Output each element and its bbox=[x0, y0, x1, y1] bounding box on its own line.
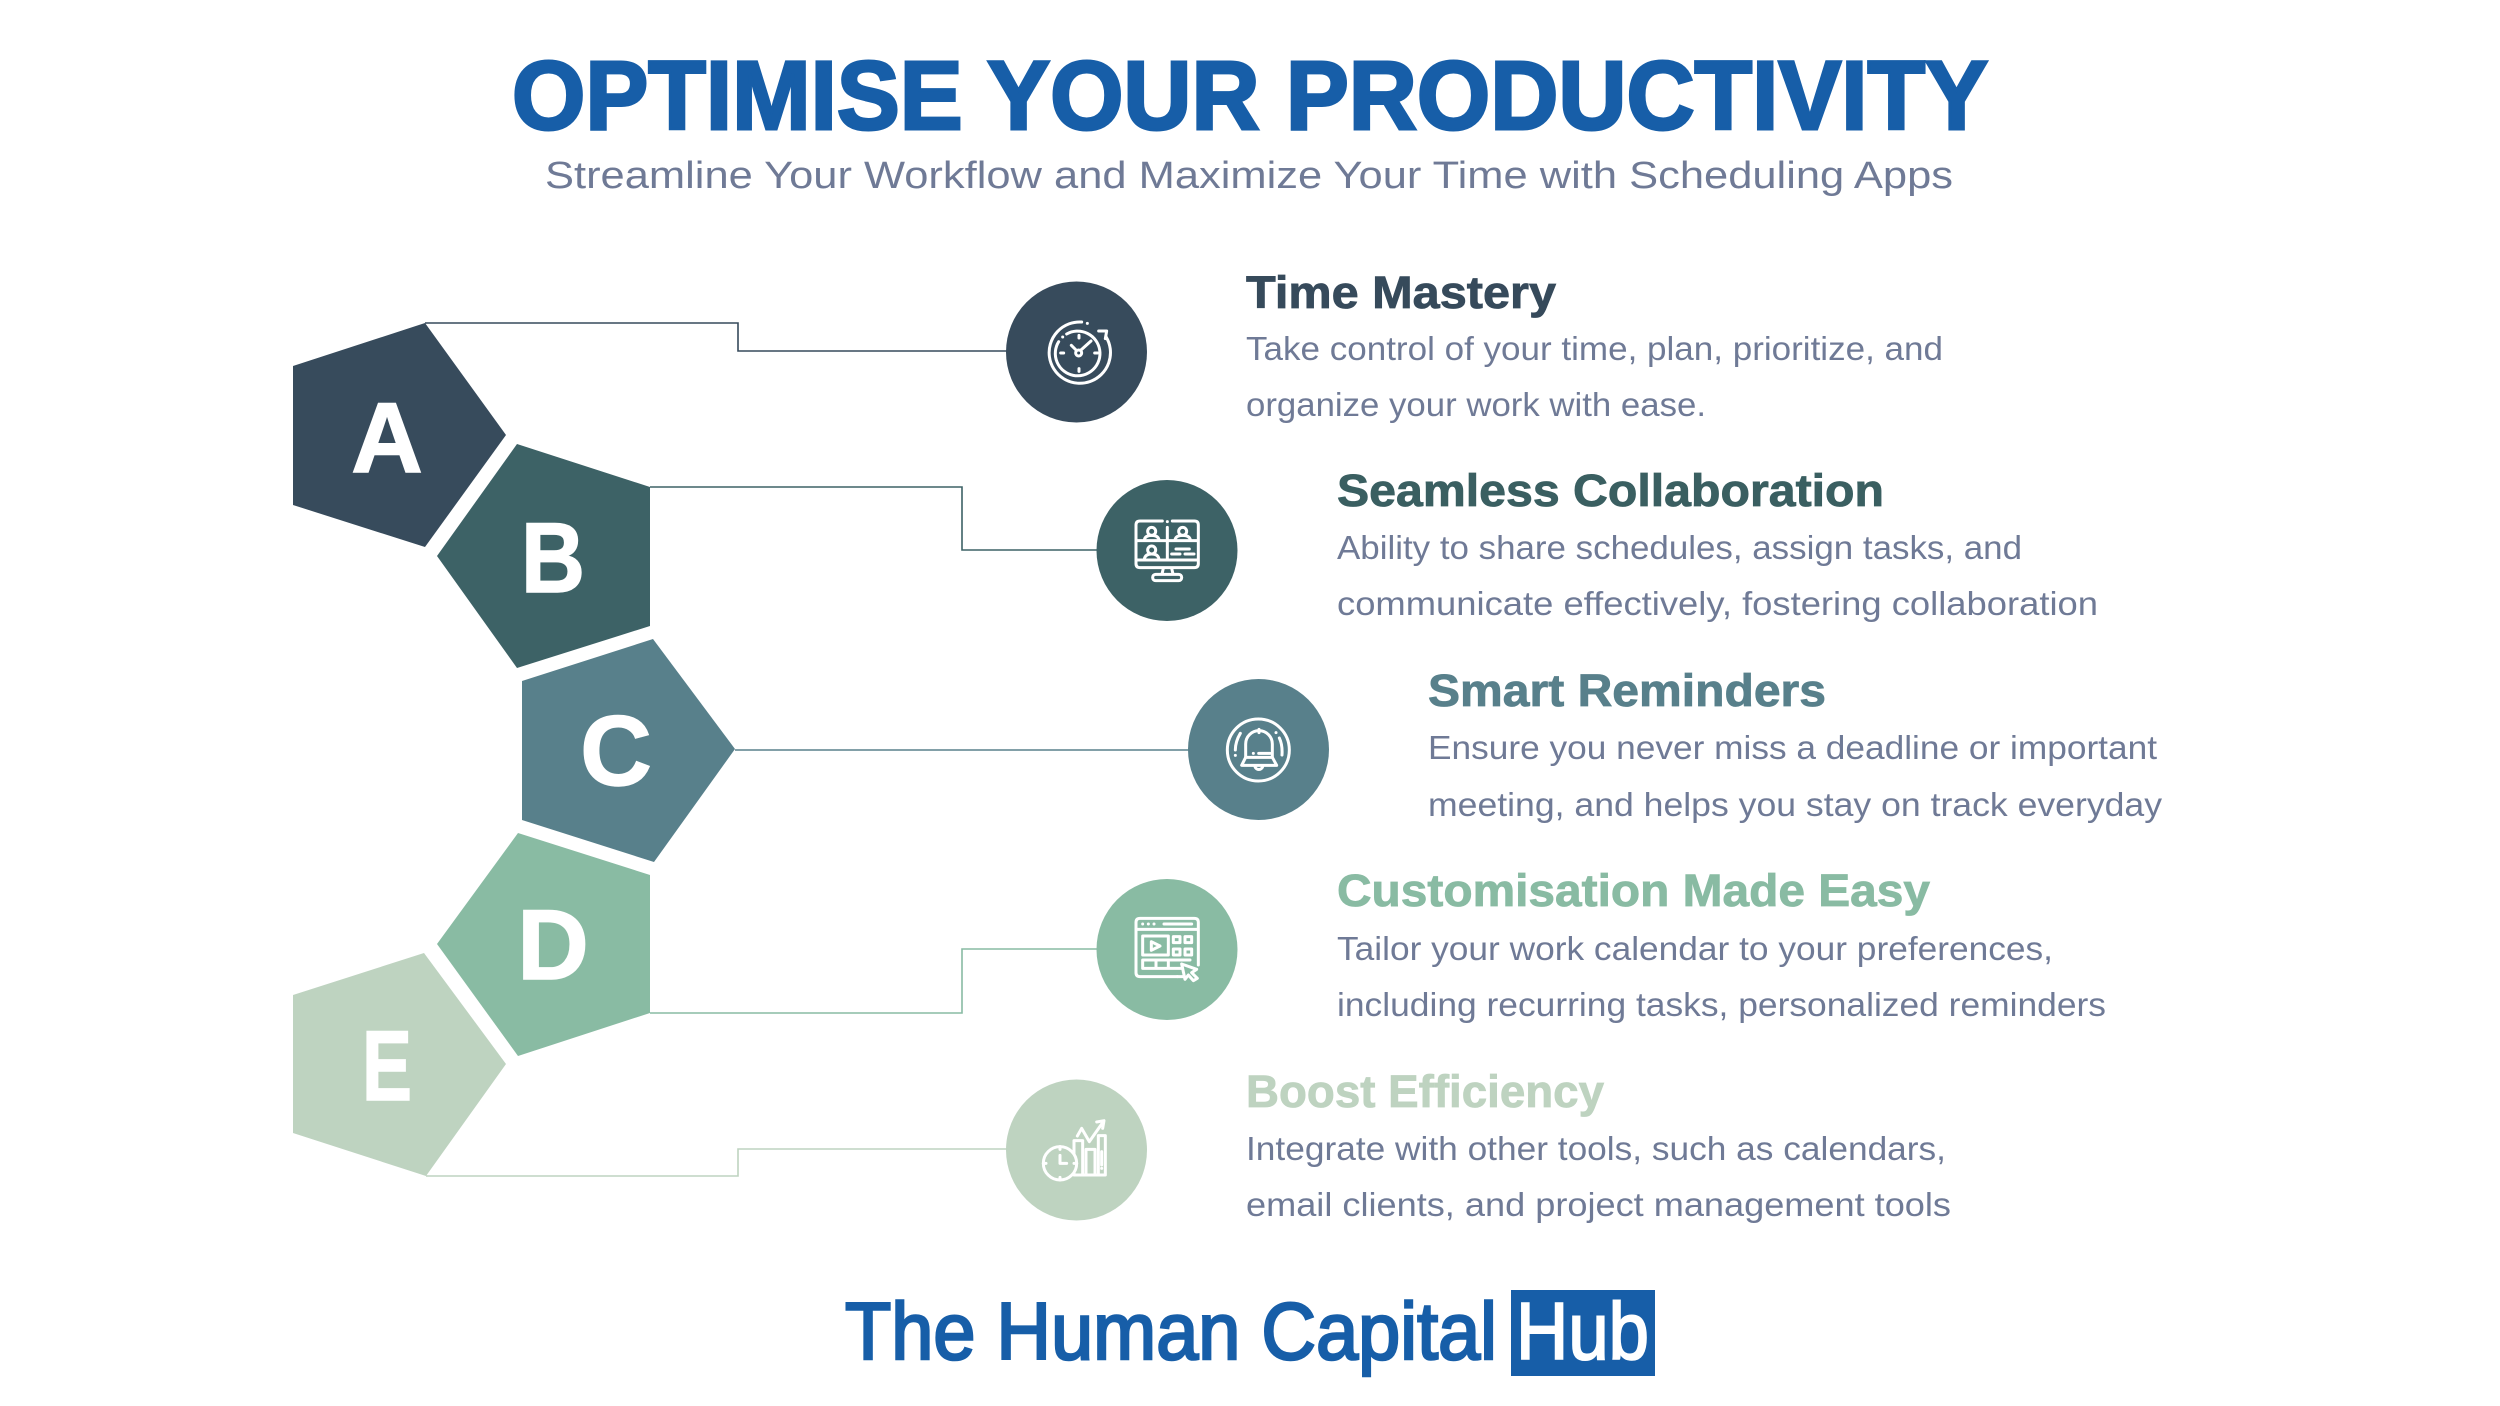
circle E bbox=[1006, 1080, 1147, 1220]
circle C bbox=[1188, 679, 1329, 820]
letter C: C bbox=[580, 695, 652, 806]
text: Boost Efficiency description: Integrate with other tools, such as calendars, bbox=[1246, 1130, 1946, 1167]
text: Seamless Collaboration description: communicate effectively, fostering collaboration bbox=[1337, 585, 2098, 622]
icon: clock and growth chart bbox=[1043, 1121, 1105, 1180]
text: Time Mastery description: organize your work with ease. bbox=[1246, 386, 1706, 423]
letter D: D bbox=[517, 889, 589, 1000]
icon: clock with circular arrow bbox=[1049, 322, 1110, 383]
pentagon A bbox=[293, 323, 506, 547]
title: OPTIMISE YOUR PRODUCTIVITY bbox=[512, 41, 1988, 150]
pentagon C bbox=[522, 639, 735, 862]
logo wordmark: The Human Capital bbox=[845, 1287, 1497, 1377]
text: Seamless Collaboration description bbox=[1337, 529, 2098, 622]
text: Boost Efficiency description: email clients, and project management tools bbox=[1246, 1186, 1951, 1223]
logo box bbox=[1511, 1290, 1655, 1376]
icon: video conference monitor bbox=[1136, 521, 1198, 581]
icon: bell bbox=[1227, 719, 1289, 781]
logo box text: Hub bbox=[1516, 1287, 1649, 1377]
connector C bbox=[735, 749, 1190, 751]
pentagon B bbox=[437, 444, 650, 668]
text: Time Mastery description bbox=[1246, 330, 1943, 423]
circle A bbox=[1006, 282, 1147, 422]
text: Customisation Made Easy description: Tailor your work calendar to your preferences, bbox=[1337, 930, 2053, 967]
heading: Smart Reminders: Smart Reminders bbox=[1428, 665, 1826, 716]
connector B bbox=[650, 487, 1100, 550]
circle B bbox=[1096, 480, 1238, 621]
text: Smart Reminders description bbox=[1428, 729, 2163, 823]
panel: D Customisation Made Easy bbox=[437, 833, 2106, 1056]
panel: A Time Mastery bbox=[293, 267, 1943, 547]
logo: The Human Capital Hub bbox=[845, 1287, 1655, 1377]
heading: Boost Efficiency: Boost Efficiency bbox=[1246, 1066, 1604, 1117]
connector D bbox=[650, 949, 1100, 1013]
circle D bbox=[1096, 879, 1238, 1020]
letter A: A bbox=[351, 382, 423, 493]
text: Boost Efficiency description bbox=[1246, 1130, 1951, 1223]
text: Seamless Collaboration description: Ability to share schedules, assign tasks, and bbox=[1337, 529, 2022, 566]
pentagon D bbox=[437, 833, 650, 1056]
text: Customisation Made Easy description: including recurring tasks, personalized reminders bbox=[1337, 986, 2106, 1023]
text: Customisation Made Easy description bbox=[1337, 930, 2106, 1023]
panel: E Boost Efficiency bbox=[293, 953, 1951, 1223]
heading: Customisation Made Easy: Customisation Made Easy bbox=[1337, 865, 1930, 916]
pentagon E bbox=[293, 953, 506, 1176]
panel: C Smart Reminders bbox=[522, 639, 2163, 862]
text: Smart Reminders description: Ensure you never miss a deadline or important bbox=[1428, 729, 2157, 766]
text: Time Mastery description: Take control of your time, plan, prioritize, and bbox=[1246, 330, 1943, 367]
text: Smart Reminders description: meeting, and helps you stay on track everyday bbox=[1428, 786, 2163, 823]
letter E: E bbox=[362, 1010, 412, 1121]
connector A bbox=[425, 323, 1010, 351]
subtitle: Streamline Your Workflow and Maximize Your Time with Scheduling Apps bbox=[545, 155, 1953, 197]
heading: Seamless Collaboration: Seamless Collaboration bbox=[1337, 465, 1884, 516]
panel: B Seamless Collaboration bbox=[437, 444, 2098, 668]
icon: customisable browser window bbox=[1136, 918, 1198, 981]
letter B: B bbox=[521, 502, 585, 613]
connector E bbox=[426, 1149, 1010, 1176]
heading: Time Mastery: Time Mastery bbox=[1246, 267, 1556, 318]
